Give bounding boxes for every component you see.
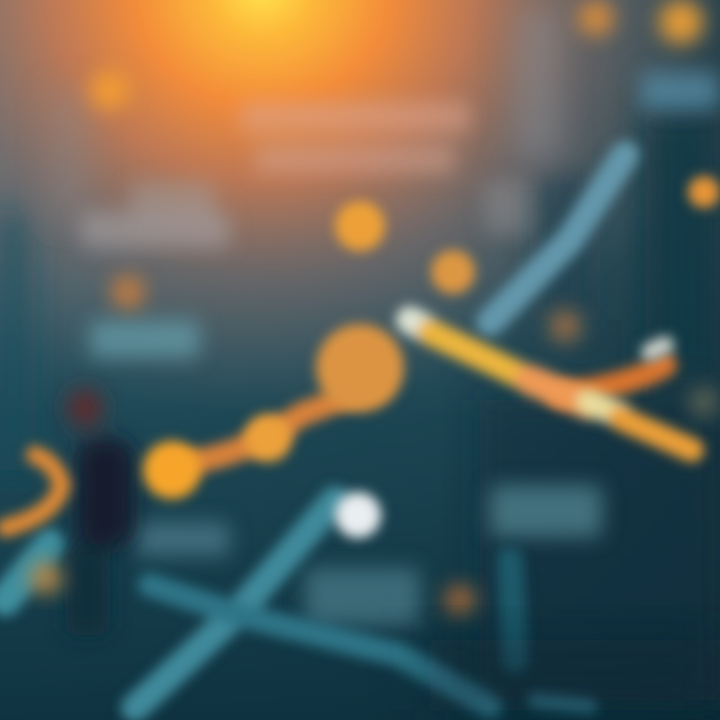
- pale building blocks: [80, 72, 720, 626]
- orange curved connector: [5, 365, 665, 528]
- teal network lines: [5, 155, 625, 708]
- dark silhouette figure: [65, 388, 134, 635]
- node: bottom centre: [444, 584, 476, 616]
- node: lower left: [143, 441, 201, 499]
- node: far right faint: [689, 387, 719, 417]
- bottom vignette: [430, 640, 720, 710]
- sun glow: [0, 0, 720, 480]
- pencil-like diagonal bar: [410, 320, 692, 450]
- node: top right two: [659, 0, 703, 44]
- node: bottom left: [30, 562, 62, 594]
- node: large centre: [316, 324, 404, 412]
- node: mid left: [111, 275, 145, 309]
- node: white: [335, 492, 381, 538]
- node: upper left: [90, 70, 130, 110]
- node: right of centre: [431, 250, 475, 294]
- node: upper centre: [335, 201, 385, 251]
- node: top right one: [578, 0, 614, 36]
- node: faint right: [548, 309, 582, 343]
- node: middle connector: [244, 414, 292, 462]
- node: right edge: [688, 176, 720, 208]
